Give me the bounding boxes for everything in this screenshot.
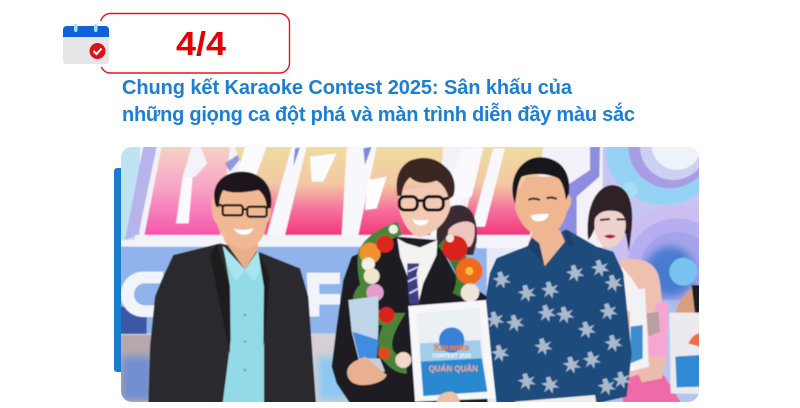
title: Chung kết Karaoke Contest 2025: Sân khấu của [122, 77, 573, 99]
man in floral shirt [486, 157, 632, 405]
photo backdrop [121, 147, 699, 402]
far right person [676, 288, 696, 314]
accent bar [114, 168, 126, 372]
backdrop letters C and E [121, 272, 340, 317]
flower garland [359, 225, 483, 368]
title: những giọng ca đột phá và màn trình diễn đầy màu sắc [122, 102, 635, 126]
background contestant, right [588, 185, 700, 403]
certificate, far right [669, 313, 700, 394]
young winner with garland [332, 158, 487, 403]
speaker art at right [603, 147, 703, 403]
badge: step counter [100, 14, 290, 73]
certificate, right middle [630, 288, 649, 372]
step number: 4/4 [176, 25, 227, 62]
crystal trophy [347, 296, 387, 385]
photo: winners on stage [121, 147, 699, 402]
certificate: Quán Quân [408, 300, 495, 403]
icon: calendar with check [60, 21, 112, 67]
background contestant, centre [436, 205, 477, 255]
certificate: Quán Quân: QUÁN QUÂN [429, 365, 478, 374]
certificate: Quán Quân: Karaoke [434, 342, 469, 352]
title [122, 77, 635, 126]
certificate: Quán Quân: CONTEST 2025 [432, 354, 471, 360]
man in black blazer [148, 172, 316, 403]
